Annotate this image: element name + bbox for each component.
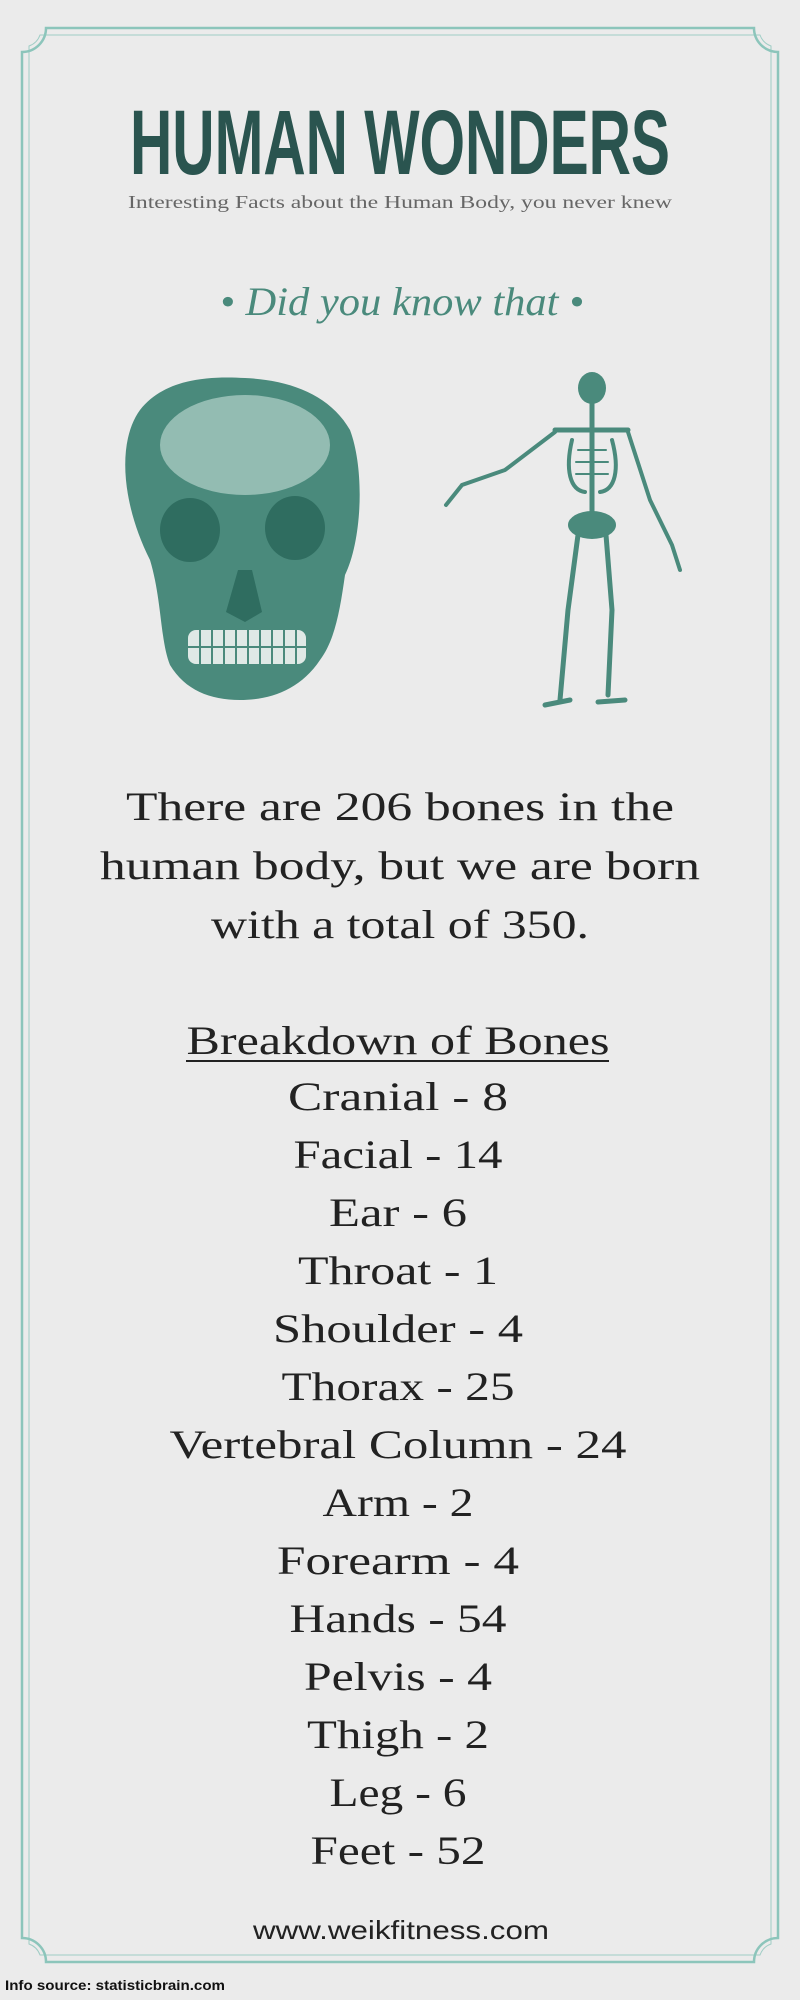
bone breakdown list: Shoulder - 4 <box>273 1306 523 1351</box>
bone breakdown list: Thigh - 2 <box>307 1712 489 1757</box>
main fact text: human body, but we are born <box>100 843 700 888</box>
bone breakdown list: Feet - 52 <box>310 1828 486 1873</box>
main fact text: There are 206 bones in the <box>126 784 674 829</box>
info source: Info source: statisticbrain.com <box>5 1977 225 1993</box>
main fact text: with a total of 350. <box>211 902 589 947</box>
bone breakdown list: Throat - 1 <box>298 1248 498 1293</box>
illustration: skeleton <box>446 372 680 705</box>
bone breakdown list: Hands - 54 <box>290 1596 506 1641</box>
bone breakdown list: Vertebral Column - 24 <box>170 1422 626 1467</box>
bone breakdown list: Leg - 6 <box>330 1770 466 1815</box>
bone breakdown list: Forearm - 4 <box>277 1538 519 1583</box>
breakdown heading: Breakdown of Bones <box>186 1018 610 1063</box>
website footer: www.weikfitness.com <box>252 1915 549 1945</box>
bone breakdown list: Thorax - 25 <box>282 1364 514 1409</box>
bone breakdown list: Pelvis - 4 <box>304 1654 492 1699</box>
bone breakdown list: Arm - 2 <box>322 1480 474 1525</box>
bone breakdown list: Cranial - 8 <box>288 1074 508 1119</box>
bone breakdown list <box>170 1074 626 1873</box>
illustration: skull <box>125 377 360 700</box>
bone breakdown list: Facial - 14 <box>294 1132 502 1177</box>
bone breakdown list: Ear - 6 <box>329 1190 467 1235</box>
main fact text <box>100 784 700 947</box>
section heading: did you know: • Did you know that • <box>220 279 584 324</box>
subtitle: Interesting Facts about the Human Body, you never knew <box>128 192 672 212</box>
